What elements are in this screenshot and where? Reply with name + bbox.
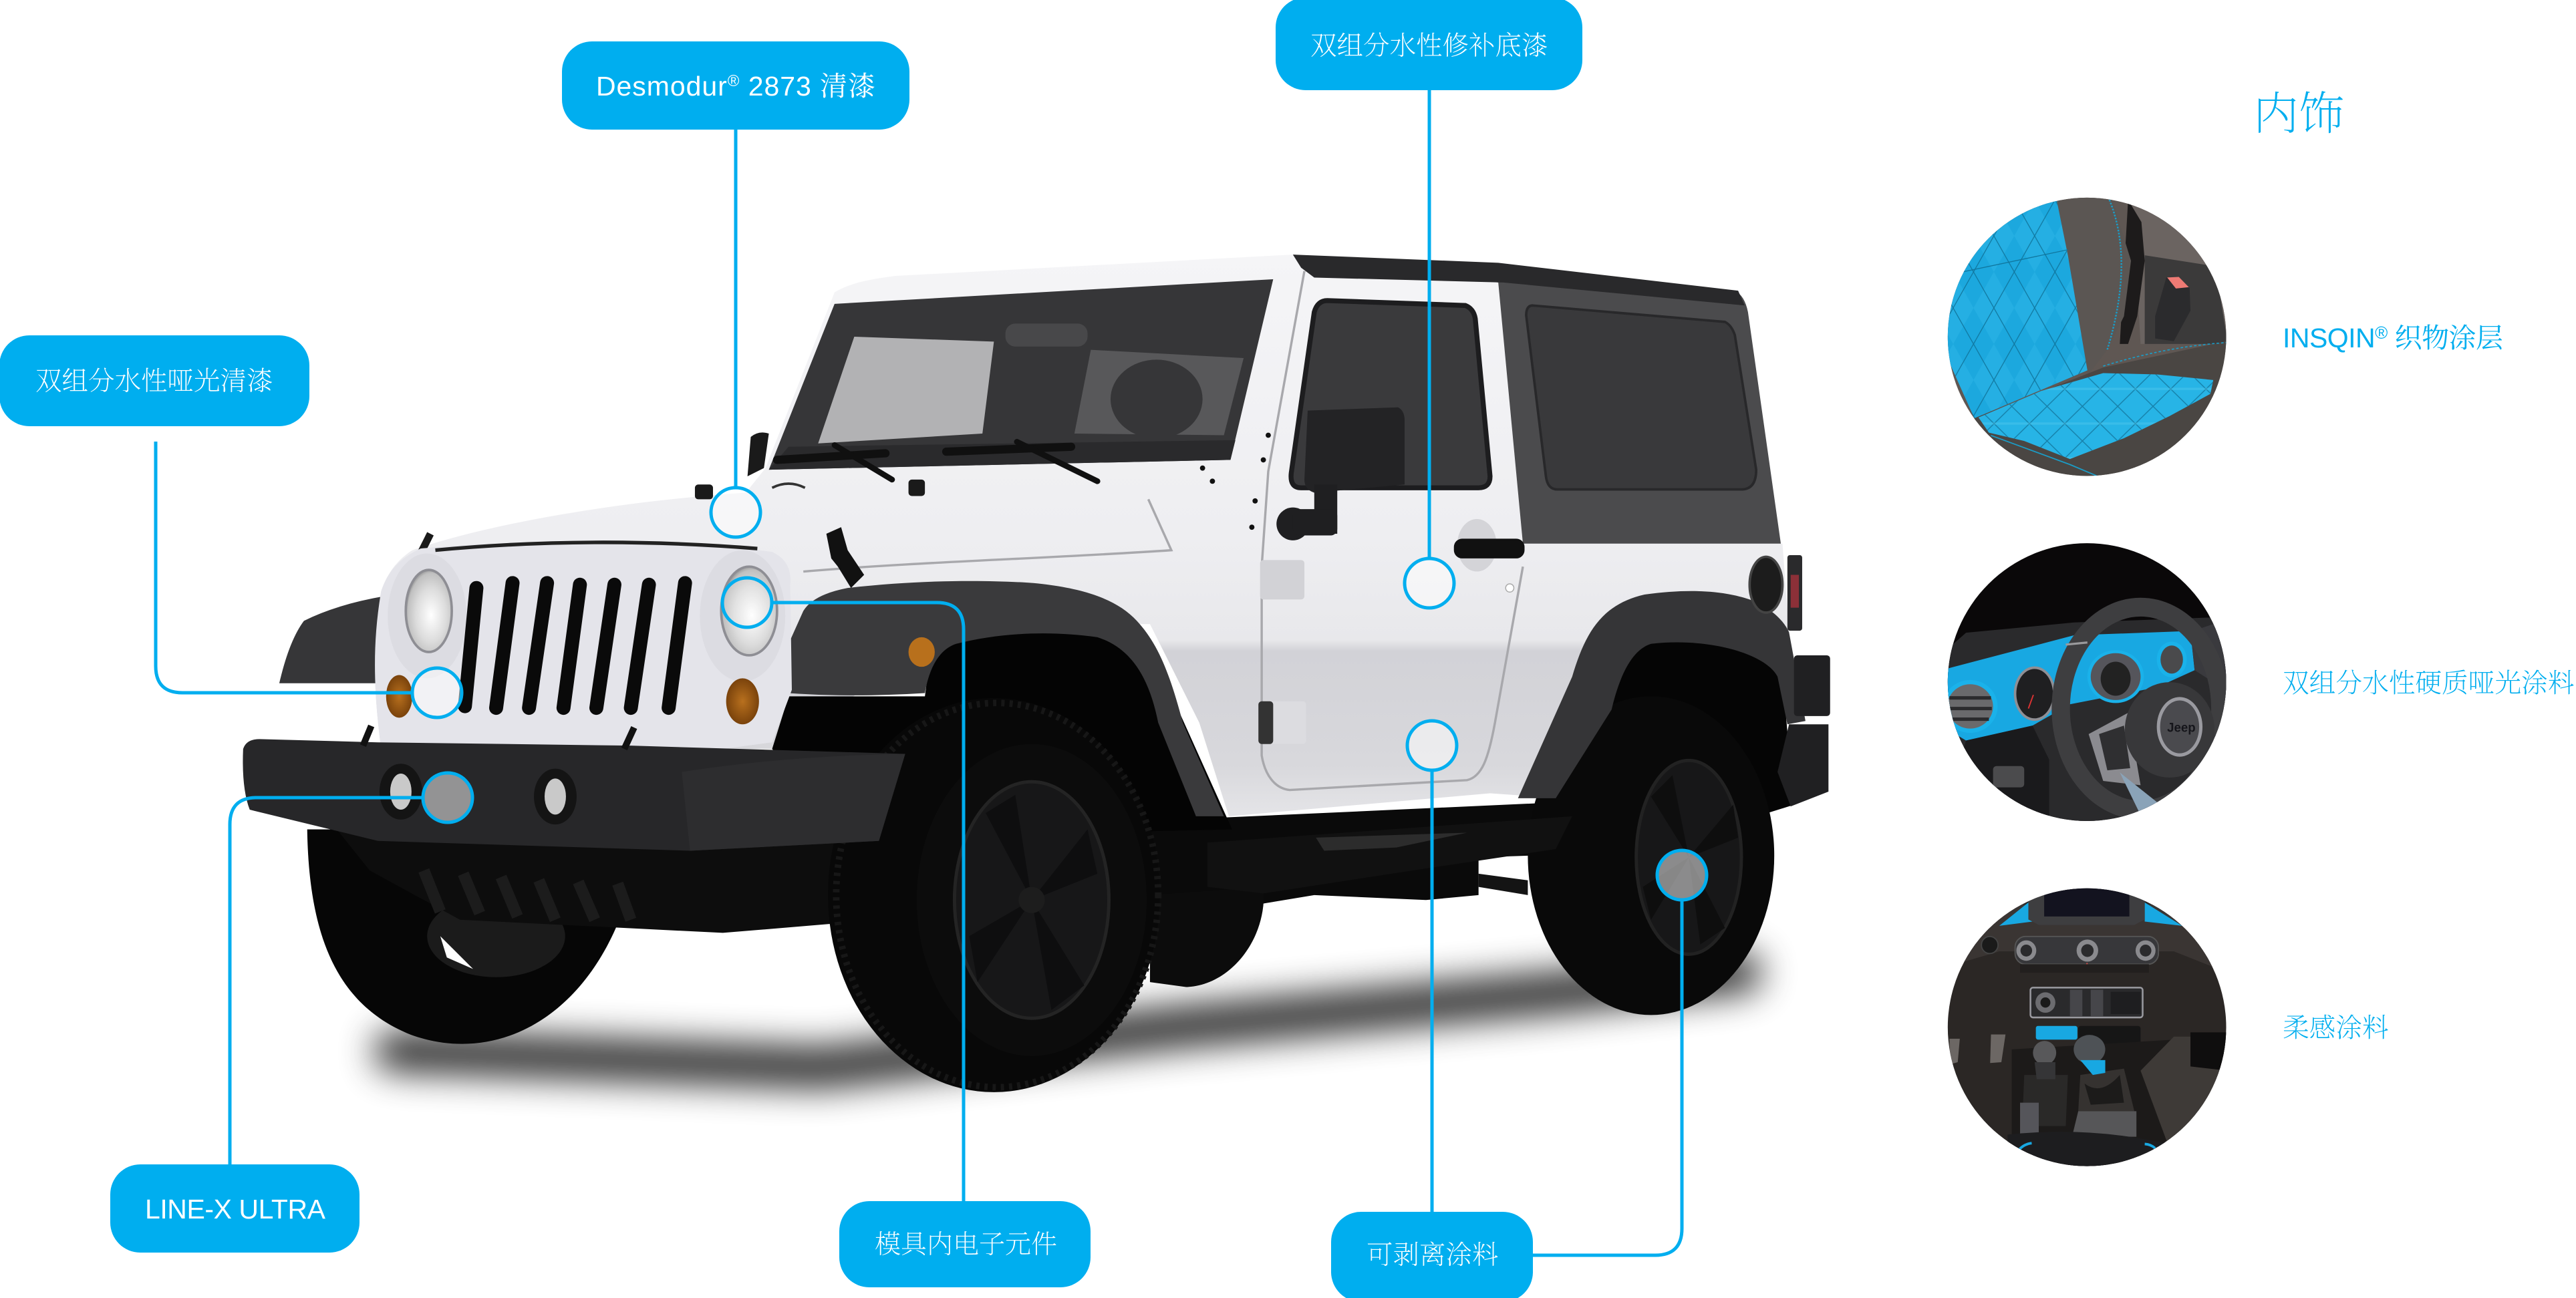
callout: 2K waterborne repair primer — [1276, 0, 1582, 90]
callout: Desmodur 2873 clearcoat: 2873 清漆 — [740, 71, 875, 102]
front wheel — [828, 698, 1160, 1092]
far front wheel — [307, 830, 619, 1044]
rear bumper — [1777, 655, 1830, 806]
photo: centre console — [1941, 883, 2232, 1173]
rear arch — [1536, 633, 1794, 821]
callout: in-mold electronics — [839, 1201, 1091, 1287]
front fender flare — [767, 581, 1224, 816]
photo: quilted seat — [1941, 194, 2232, 480]
rear side window — [1526, 305, 1756, 490]
hinges — [1258, 560, 1306, 744]
callout: 2K waterborne repair primer: 双组分水性修补底漆 — [1310, 25, 1548, 63]
fuel door — [1749, 556, 1782, 613]
callout: 2K waterborne matte clearcoat: 双组分水性哑光清漆 — [35, 361, 273, 398]
photo: dashboard: Jeep — [2167, 721, 2196, 736]
callout: 2K waterborne matte clearcoat — [0, 335, 309, 426]
label: soft-touch coating: 柔感涂料 — [2283, 1007, 2389, 1045]
label: INSQIN fabric coating: 织物涂层 — [2388, 323, 2503, 353]
callout: strippable coating: 可剥离涂料 — [1367, 1235, 1498, 1272]
marker circles — [412, 488, 1707, 900]
callout: strippable coating — [1331, 1212, 1533, 1298]
callout: Desmodur 2873 clearcoat: Desmodur — [596, 71, 727, 102]
amber indicators — [386, 675, 759, 724]
wipers — [777, 442, 1097, 481]
hood fittings — [417, 432, 925, 555]
callout: LINE-X ULTRA — [110, 1164, 360, 1253]
side mirror — [1276, 408, 1405, 540]
windshield — [769, 279, 1273, 470]
photo: dashboard — [1941, 538, 2232, 828]
grille panel — [375, 542, 792, 749]
label: INSQIN fabric coating: INSQIN — [2283, 323, 2376, 353]
side door window — [1291, 301, 1490, 488]
tail light — [1787, 555, 1802, 631]
rear fender — [1518, 591, 1806, 798]
hardtop roof — [1293, 255, 1781, 544]
side marker lamp — [909, 637, 935, 667]
step rail — [1207, 816, 1572, 895]
undercarriage — [1142, 802, 1577, 928]
skid plate — [337, 830, 871, 933]
car body — [375, 255, 1789, 816]
body bolts — [1200, 433, 1271, 530]
hood latch — [827, 527, 864, 588]
callout: Desmodur 2873 clearcoat: ® — [728, 72, 740, 90]
ground shadow — [394, 972, 1741, 1068]
jeep illustration — [243, 255, 1830, 1092]
front arch — [772, 624, 1232, 838]
front bumper — [243, 726, 905, 851]
left fender flare — [279, 596, 384, 683]
label: 2K waterborne hard matte coating: 双组分水性硬质哑光涂料 — [2283, 662, 2575, 700]
far rear wheel — [1150, 887, 1264, 987]
callout: LINE-X ULTRA: LINE-X ULTRA — [145, 1194, 326, 1225]
heading: interior: 内饰 — [2253, 78, 2344, 143]
door outline and creases — [803, 271, 1523, 790]
label: INSQIN fabric coating: ® — [2375, 323, 2388, 343]
callout: Desmodur 2873 clearcoat — [562, 41, 909, 130]
door handle — [1454, 519, 1524, 592]
connector lines — [156, 90, 1682, 1255]
headlights — [406, 566, 777, 655]
fog lights — [380, 764, 577, 824]
callout: in-mold electronics: 模具内电子元件 — [875, 1224, 1057, 1261]
grille slots — [465, 583, 685, 708]
rear wheel — [1528, 696, 1774, 1015]
